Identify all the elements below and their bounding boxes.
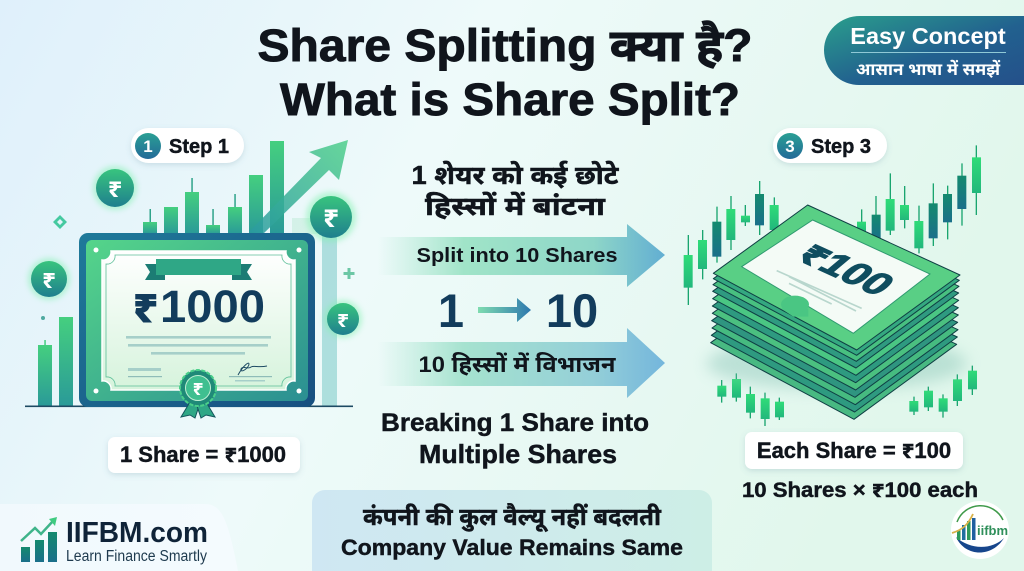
- logo: IIFBM.com: Learn Finance Smartly: [66, 548, 207, 565]
- panel: step 2 explanation: [378, 160, 665, 469]
- step 1 pill: 1: [143, 137, 153, 156]
- logo: iifbm seal: iifbm: [977, 523, 1008, 538]
- logo icon: [21, 517, 57, 562]
- label: each share: [745, 432, 963, 469]
- arrow: 10 parts: 10 हिस्सों में विभाजन: [418, 352, 616, 377]
- arrow: split into 10 shares: [378, 224, 665, 287]
- step 3 pill: Step 3: [811, 136, 871, 158]
- note stack: [707, 205, 967, 419]
- title: What is Share Split?: [280, 74, 740, 125]
- title: Share Splitting क्या है?: [258, 20, 752, 71]
- hindi heading: हिस्सों में बांटना: [425, 191, 607, 221]
- note value: ₹100: [788, 237, 904, 302]
- step 1 chart and arrow: [25, 140, 354, 407]
- candlesticks: [684, 145, 981, 426]
- coin icons: ₹: [108, 175, 122, 203]
- logo: IIFBM.com: IIFBM.com: [66, 517, 208, 549]
- certificate: [79, 233, 315, 418]
- coin icons: ₹: [337, 309, 349, 332]
- one to ten: [438, 284, 598, 337]
- panel: company value: Company Value Remains Same: [341, 535, 683, 560]
- panel: step 3 stack of notes: [684, 128, 981, 502]
- label: total: 10 Shares × ₹100 each: [742, 479, 978, 502]
- certificate value: ₹: [133, 283, 158, 332]
- step 1 pill: Step 1: [169, 136, 229, 158]
- badge: easy concept: [824, 16, 1024, 85]
- english explanation: Breaking 1 Share into: [381, 409, 649, 437]
- badge: easy concept: आसान भाषा में समझें: [856, 59, 1001, 79]
- badge: easy concept: Easy Concept: [850, 23, 1006, 49]
- label: 1 share: 1 Share = ₹1000: [120, 442, 286, 467]
- step 1 pill: [131, 128, 244, 163]
- hindi heading: [412, 160, 620, 221]
- label: 1 share: [108, 437, 300, 473]
- step 3 pill: [773, 128, 887, 163]
- arrow: 10 parts: [378, 328, 665, 398]
- seal: [180, 370, 216, 418]
- coin icons: ₹: [323, 202, 339, 233]
- logo: IIFBM.com: [0, 504, 238, 571]
- top note face: [742, 220, 930, 333]
- ribbon banner: [145, 259, 252, 280]
- step 3 pill: 3: [785, 137, 795, 156]
- title: [258, 20, 752, 125]
- coin icons: ₹: [42, 267, 56, 294]
- panel: company value: [312, 490, 712, 571]
- seal: ₹: [193, 379, 203, 400]
- signature: [238, 363, 267, 375]
- arrow: split into 10 shares: Split into 10 Shares: [416, 245, 618, 267]
- certificate value: 1000: [160, 281, 265, 332]
- hindi heading: 1 शेयर को कई छोटे: [412, 160, 620, 190]
- panel: step 1 share certificate: [25, 128, 362, 473]
- english explanation: Multiple Shares: [419, 439, 617, 469]
- label: each share: Each Share = ₹100: [757, 438, 951, 463]
- coin icons: [28, 166, 362, 338]
- logo: iifbm seal: [951, 501, 1009, 559]
- one to ten: 10: [546, 284, 598, 337]
- panel: company value: कंपनी की कुल वैल्यू नहीं बदलती: [363, 503, 662, 532]
- one to ten: 1: [438, 284, 464, 337]
- english explanation: [381, 409, 649, 469]
